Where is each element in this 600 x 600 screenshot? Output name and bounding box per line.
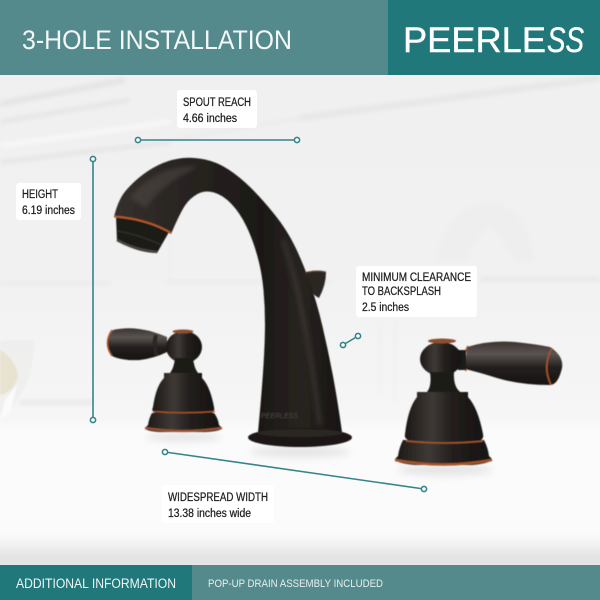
callout: height: HEIGHT — [22, 189, 58, 201]
title: 3-HOLE INSTALLATION — [22, 25, 292, 55]
callout: spout reach — [177, 90, 257, 128]
right handle — [395, 338, 562, 465]
dimension line: height — [90, 156, 96, 423]
callout: widespread width — [162, 485, 274, 523]
footer: pop-up drain note — [192, 565, 600, 600]
callout: height — [16, 183, 81, 220]
dimension line: spout reach — [135, 137, 300, 143]
logo: Peerless wordmark: PEERLE — [403, 21, 546, 60]
spout copper ring — [114, 216, 171, 233]
callout: widespread width: WIDESPREAD WIDTH — [168, 492, 268, 504]
dimension line: clearance — [340, 333, 361, 348]
pop-up knob behind spout — [306, 270, 326, 298]
footer: additional information heading: ADDITIONAL INFORMATION — [16, 576, 176, 591]
faucet spout — [114, 158, 352, 447]
dimension line: widespread width — [162, 449, 427, 492]
glass bowl at left edge — [0, 340, 35, 420]
callout: widespread width: 13.38 inches wide — [168, 508, 251, 520]
callout: minimum clearance — [356, 266, 477, 317]
callout: minimum clearance: TO BACKSPLASH — [362, 286, 441, 298]
faucet base — [248, 428, 352, 447]
callout: minimum clearance: MINIMUM CLEARANCE — [362, 272, 471, 284]
logo: slanted double S: SS — [547, 21, 584, 60]
callout: spout reach: SPOUT REACH — [183, 97, 251, 109]
footer: pop-up drain note: POP-UP DRAIN ASSEMBLY INCLUDED — [208, 578, 383, 590]
callout: minimum clearance: 2.5 inches — [362, 302, 409, 314]
left handle — [108, 328, 222, 432]
callout: spout reach: 4.66 inches — [183, 113, 237, 125]
header band left — [0, 0, 388, 75]
header logo panel — [388, 0, 600, 75]
faucet shadows — [145, 433, 493, 475]
aerator — [116, 216, 169, 253]
callout: height: 6.19 inches — [22, 205, 75, 217]
brand mark on spout: PEERLESS — [261, 413, 298, 420]
footer: additional information heading — [0, 565, 192, 600]
